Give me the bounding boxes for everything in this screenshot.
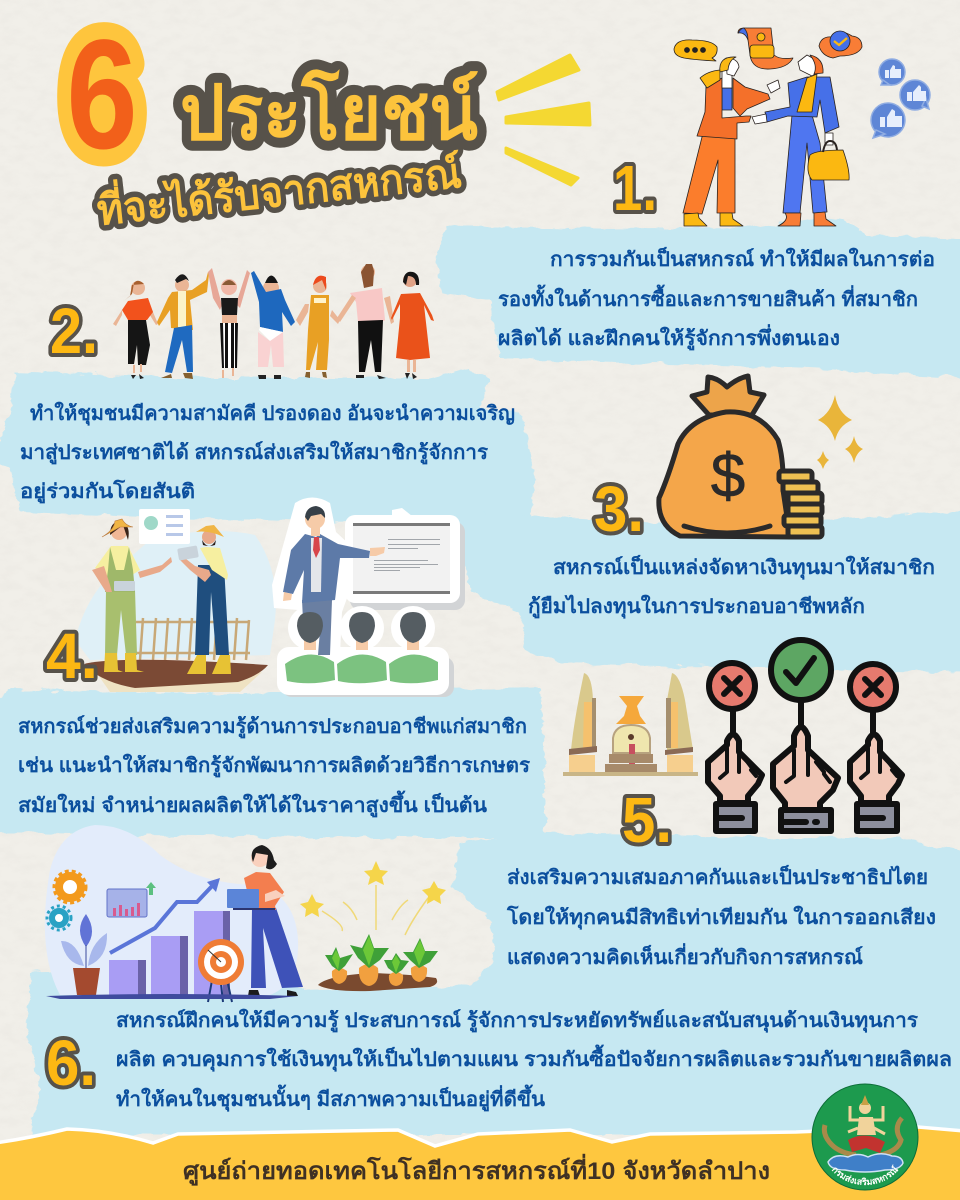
- right hand: [850, 734, 902, 803]
- text block 2: มาสู่ประเทศชาติได้ สหกรณ์ส่งเสริมให้สมาชิกรู้จักการ: [20, 440, 488, 466]
- text block 2: ทำให้ชุมชนมีความสามัคคี ปรองดอง อันจะนำความเจริญ: [30, 401, 515, 426]
- number 3: 3.: [594, 473, 644, 545]
- farmer woman: [92, 519, 172, 672]
- text block 1: ผลิตได้ และฝึกคนให้รู้จักการพึ่งตนเอง: [498, 323, 840, 352]
- target: [198, 939, 244, 1002]
- clouds: [828, 1154, 903, 1172]
- number 6: 6.: [46, 1027, 96, 1099]
- text block 4: [18, 715, 530, 819]
- text block 6: ทำให้คนในชุมชนนั้นๆ มีสภาพความเป็นอยู่ที่ดีขึ้น: [116, 1084, 545, 1113]
- icon: like bubbles: [871, 59, 930, 138]
- person 2: [157, 272, 209, 379]
- middle cuff: [781, 810, 831, 831]
- icon: yellow burst rays: [497, 55, 590, 185]
- text block 5: ส่งเสริมความเสมอภาคกันและเป็นประชาธิปไตย: [507, 864, 928, 889]
- illustration: woman with growth chart: [45, 825, 303, 1002]
- subtitle: ที่จะได้รับจากสหกรณ์: ที่จะได้รับจากสหกรณ์: [94, 143, 464, 234]
- text block 1: การรวมกันเป็นสหกรณ์ ทำให้มีผลในการต่อ: [550, 246, 935, 271]
- bars: [109, 911, 230, 996]
- person 6: [337, 264, 394, 379]
- title: ประโยชน์: ประโยชน์: [180, 68, 479, 156]
- illustration: farmers with tablet and fence: [75, 509, 276, 692]
- logo: cooperative department seal: [812, 1084, 918, 1190]
- text block 3: สหกรณ์เป็นแหล่งจัดหาเงินทุนมาให้สมาชิก: [553, 554, 935, 580]
- sticker white outline: [272, 498, 460, 695]
- check cloud: [819, 31, 862, 58]
- farmer man: [177, 525, 231, 674]
- text block 1: รองทั้งในด้านการซื้อและการขายสินค้า ที่สมาชิก: [498, 284, 918, 311]
- text block 2: อยู่ร่วมกันโดยสันติ: [20, 479, 195, 505]
- chart card: [107, 882, 156, 917]
- person 5: [296, 276, 340, 378]
- illustration: carrots and stars: [300, 861, 446, 991]
- whiteboard: [353, 523, 450, 594]
- plant: [61, 914, 107, 995]
- text block 3: [528, 554, 935, 620]
- person 7: [391, 272, 434, 379]
- number 5: 5.: [622, 784, 672, 856]
- person 3: [208, 268, 250, 378]
- left cuff: [716, 804, 755, 831]
- text block 1: [498, 246, 935, 352]
- number 1: 1.: [613, 152, 657, 224]
- footer text: ศูนย์ถ่ายทอดเทคโนโลยีการสหกรณ์ที่10 จังหวัดลำปาง: [183, 1153, 770, 1186]
- person 1: [113, 281, 158, 379]
- illustration: democracy monument: [563, 673, 698, 776]
- presenter: [283, 506, 385, 655]
- person 4: [251, 271, 295, 379]
- gears: [47, 871, 86, 930]
- deity: [857, 1117, 876, 1135]
- icon: money bag with coins: [659, 376, 822, 537]
- number 4: 4.: [46, 620, 98, 692]
- text block 6: [116, 1008, 952, 1113]
- icon: money bag with coins: $: [711, 442, 745, 511]
- panel: blue brush bands: [0, 218, 960, 1135]
- text block 6: สหกรณ์ฝึกคนให้มีความรู้ ประสบการณ์ รู้จักการประหยัดทรัพย์และสนับสนุนด้านเงินทุนการ: [116, 1008, 918, 1034]
- illustration: presenter with whiteboard and audience: [272, 498, 465, 697]
- woman: [227, 845, 303, 996]
- seal text: กรมส่งเสริมสหกรณ์: [832, 1164, 898, 1186]
- man in blue: [752, 55, 849, 226]
- scroll document: [738, 28, 793, 69]
- icon: voting hands: [708, 640, 902, 831]
- footer band: [0, 1127, 960, 1200]
- text block 3: กู้ยืมไปลงทุนในการประกอบอาชีพหลัก: [528, 594, 865, 620]
- text block 4: สมัยใหม่ จำหน่ายผลผลิตให้ได้ในราคาสูงขึ้น เป็นต้น: [18, 790, 487, 819]
- text block 4: สหกรณ์ช่วยส่งเสริมความรู้ด้านการประกอบอาชีพแก่สมาชิก: [18, 715, 527, 740]
- illustration: seven people holding hands: [113, 264, 434, 379]
- text block 4: เช่น แนะนำให้สมาชิกรู้จักพัฒนาการผลิตด้วยวิธีการเกษตร: [18, 753, 530, 779]
- left hand: [708, 734, 762, 803]
- growth arrow: [110, 884, 214, 953]
- text block 2: [20, 401, 515, 505]
- right cuff: [857, 804, 897, 831]
- icon: sparkles: [817, 395, 863, 469]
- text block 6: ผลิต ควบคุมการใช้เงินทุนให้เป็นไปตามแผน รวมกันซื้อปัจจัยการผลิตและรวมกันขายผลิตผล: [116, 1044, 952, 1072]
- nagas: [824, 1118, 902, 1156]
- text block 5: [506, 864, 936, 969]
- number 2: 2.: [50, 295, 98, 367]
- audience: [285, 612, 438, 683]
- title: big number 6: 6: [66, 8, 138, 182]
- middle hand: [773, 727, 838, 810]
- speech bubble left: [674, 40, 717, 61]
- text block 5: แสดงความคิดเห็นเกี่ยวกับกิจการสหกรณ์: [507, 942, 863, 969]
- text block 5: โดยให้ทุกคนมีสิทธิเท่าเทียมกัน ในการออกเสียง: [506, 905, 936, 930]
- woman in orange: [683, 57, 780, 226]
- illustration: two people shaking hands: [674, 28, 862, 226]
- sticker shadows: [282, 522, 465, 697]
